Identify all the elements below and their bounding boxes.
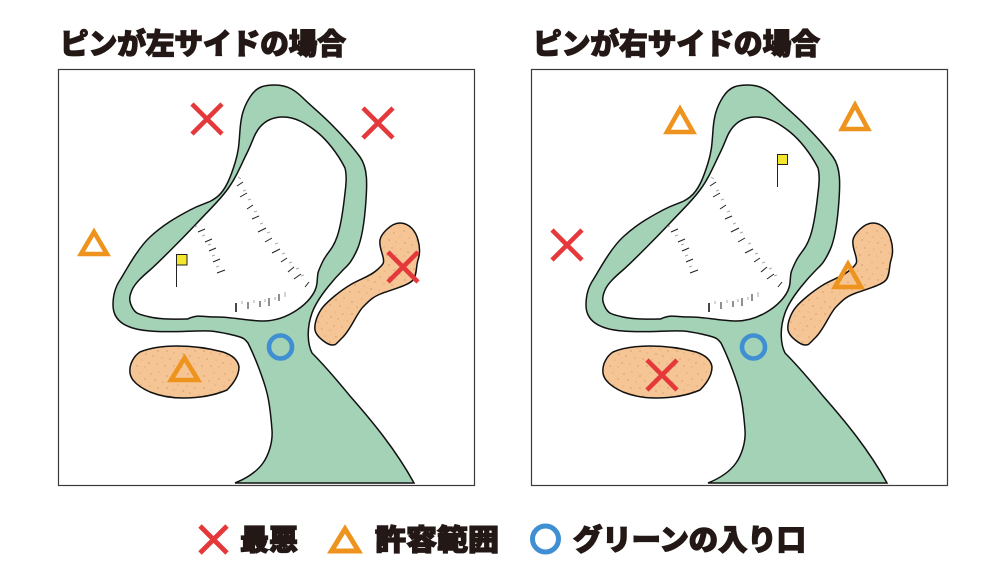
marker: green entrance circle [269,336,292,358]
legend icon: triangle [332,529,358,551]
marker: triangle on lower bunker [171,358,198,380]
marker: triangle upper left [667,109,693,132]
marker: cross left [552,230,582,260]
marker: triangle left [81,232,107,254]
marker: triangle upper right [842,105,868,129]
marker: cross on lower bunker [647,360,677,390]
course diagram: green, fringe and bunkers [113,85,420,483]
course diagram: green, fringe and bunkers [586,85,892,483]
marker: cross upper left [192,104,222,134]
panel: pin on right side [532,27,948,486]
icon: pin flag [778,154,788,187]
marker: cross upper right [363,108,393,138]
heading: pin on right: ピンが右サイドの場合 [533,27,820,61]
frame: right panel [532,70,948,486]
legend label: acceptable range: 許容範囲 [375,524,499,557]
marker: cross on right bunker [388,252,418,282]
marker: green entrance circle [742,336,765,358]
heading: pin on left: ピンが左サイドの場合 [60,27,346,61]
legend label: worst: 最悪 [240,525,298,557]
legend label: green entrance: グリーンの入り口 [573,523,806,557]
marker: triangle on right bunker [835,264,861,287]
icon: pin flag [176,254,187,287]
legend icon: cross [200,526,227,553]
legend icon: circle [532,526,558,552]
legend [200,523,806,557]
panel: pin on left side [58,27,474,486]
frame: left panel [58,70,474,486]
